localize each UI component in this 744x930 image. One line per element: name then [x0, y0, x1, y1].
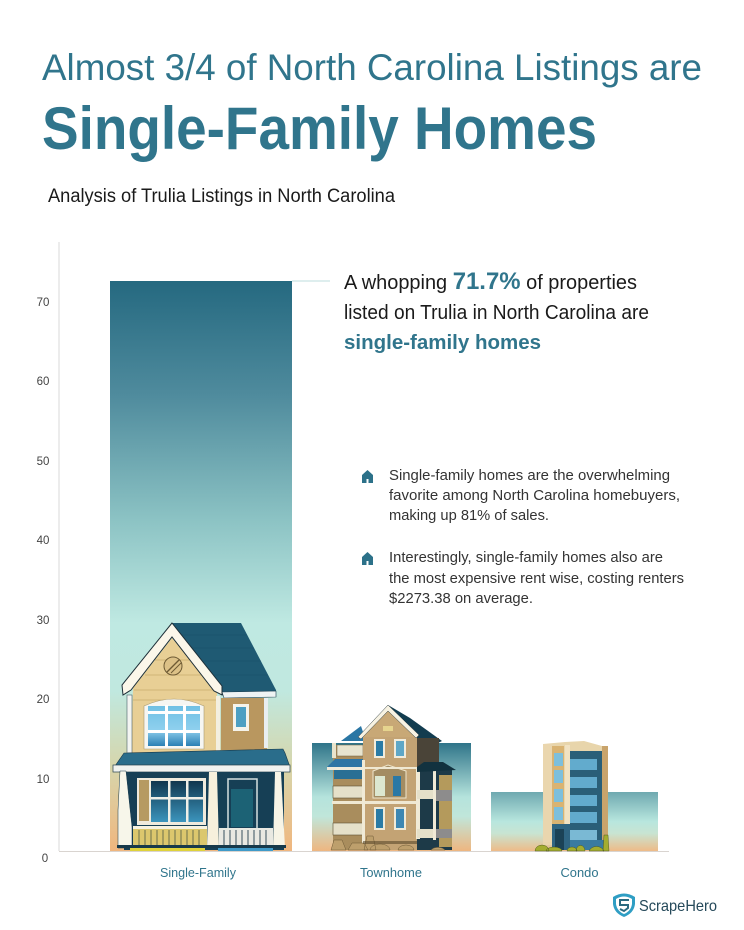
icon: bullet house: [362, 470, 373, 483]
bar chart: [37, 242, 669, 880]
bullet one: making up 81% of sales.: [389, 507, 549, 524]
callout: [344, 268, 649, 354]
y axis: 70: [37, 297, 49, 309]
icon: single-family house: [113, 623, 290, 851]
y axis: 40: [37, 535, 49, 547]
subtitle: Analysis of Trulia Listings in North Carolina: [48, 186, 395, 207]
bullet two: [362, 549, 684, 607]
y axis: [37, 242, 59, 865]
y axis: 0: [42, 853, 48, 865]
x axis labels: Townhome: [360, 866, 422, 880]
logo: ScrapeHero: [613, 894, 717, 917]
logo: ScrapeHero: ScrapeHero: [639, 898, 717, 915]
bar: single-family: [110, 281, 292, 851]
title: [42, 47, 702, 162]
icon: townhome building: [327, 705, 456, 850]
icon: shield: [613, 894, 635, 917]
x axis labels: Condo: [560, 866, 599, 880]
bullet two: Interestingly, single-family homes also are: [389, 549, 663, 566]
title line two: Single-Family Homes: [42, 95, 597, 162]
callout: listed on Trulia in North Carolina are: [344, 302, 649, 324]
callout: single-family homes: [344, 332, 541, 354]
icon: bullet house: [362, 552, 373, 565]
bar: townhome: [312, 743, 471, 851]
y axis: 60: [37, 376, 49, 388]
callout: A whopping 71.7% of properties: [344, 268, 637, 295]
bullet one: [362, 467, 680, 524]
bullet two: $2273.38 on average.: [389, 590, 533, 607]
y axis: 50: [37, 456, 49, 468]
icon: condo tower: [535, 741, 609, 851]
bullet one: Single-family homes are the overwhelming: [389, 467, 670, 484]
bullet two: the most expensive rent wise, costing renters: [389, 570, 684, 587]
y axis: 30: [37, 615, 49, 627]
bar: condo: [491, 792, 658, 851]
title line one: Almost 3/4 of North Carolina Listings are: [42, 47, 702, 88]
bullet one: favorite among North Carolina homebuyers,: [389, 487, 680, 504]
x axis labels: [160, 866, 599, 880]
y axis: 10: [37, 774, 49, 786]
y axis: 20: [37, 694, 49, 706]
x axis labels: Single-Family: [160, 866, 237, 880]
